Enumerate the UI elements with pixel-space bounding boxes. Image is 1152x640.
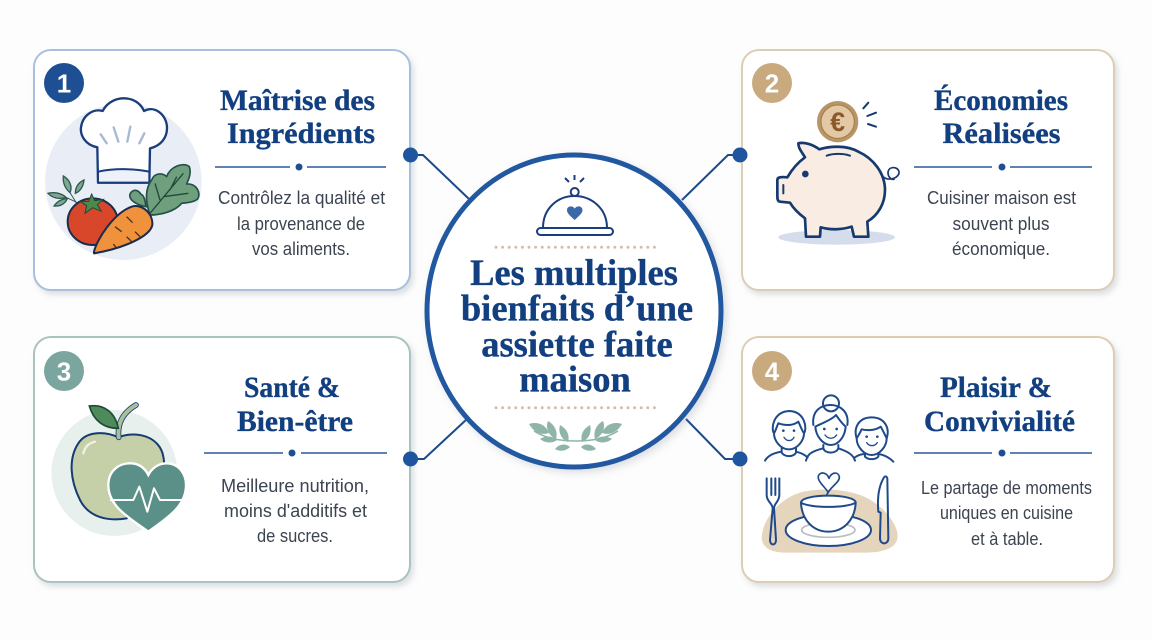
number badge 4 — [752, 351, 792, 391]
description: vos aliments. — [252, 239, 350, 259]
heading: Plaisir & — [940, 371, 1052, 404]
title: maison — [519, 358, 631, 400]
card frame — [34, 50, 410, 290]
icon: chef hat and vegetables — [45, 98, 202, 260]
heading: Réalisées — [942, 117, 1060, 150]
title: Les multiples — [470, 252, 678, 293]
number badge 1: 1 — [57, 68, 71, 98]
heading: Convivialité — [924, 405, 1075, 438]
central circle — [427, 155, 721, 467]
icon: apple and heartbeat — [51, 405, 186, 536]
heading — [934, 84, 1068, 150]
description: moins d'additifs et — [224, 501, 367, 521]
description: souvent plus — [952, 214, 1050, 234]
description: uniques en cuisine — [940, 503, 1073, 523]
description: de sucres. — [257, 526, 333, 546]
heading: Ingrédients — [227, 117, 375, 150]
heading: Économies — [934, 84, 1068, 117]
description: Contrôlez la qualité et — [218, 188, 385, 208]
heading — [237, 371, 353, 438]
number badge 4: 4 — [765, 356, 780, 386]
icon: piggy bank with euro coin — [777, 101, 899, 245]
number badge 3 — [44, 351, 84, 391]
panel: Plaisir & Convivialité — [742, 337, 1114, 582]
icon: family and shared meal — [762, 395, 898, 553]
description — [221, 476, 369, 546]
heading — [924, 371, 1075, 438]
description: Meilleure nutrition, — [221, 476, 369, 496]
description: économique. — [952, 239, 1050, 259]
panel: Économies Réalisées — [742, 50, 1114, 290]
title — [461, 252, 693, 400]
icon: piggy bank with euro coin: € — [830, 107, 845, 137]
heading: Maîtrise des — [220, 84, 375, 117]
card frame — [34, 337, 410, 582]
description: et à table. — [971, 529, 1043, 549]
title: assiette faite — [481, 324, 673, 364]
description — [927, 188, 1076, 259]
description: Cuisiner maison est — [927, 188, 1076, 208]
heading — [220, 84, 375, 150]
number badge 2: 2 — [765, 68, 779, 98]
icon: serving cloche — [537, 175, 613, 235]
number badge 1 — [44, 63, 84, 103]
heading: Santé & — [244, 371, 340, 404]
icon: laurel branches — [529, 421, 622, 451]
number badge 3: 3 — [57, 356, 71, 386]
card frame — [742, 50, 1114, 290]
description — [218, 188, 385, 259]
number badge 2 — [752, 63, 792, 103]
connectors — [403, 148, 748, 466]
description — [921, 478, 1092, 549]
description: la provenance de — [237, 214, 365, 234]
card frame — [742, 337, 1114, 582]
heading: Bien-être — [237, 405, 353, 438]
description: Le partage de moments — [921, 478, 1092, 498]
panel: Santé & Bien-être — [34, 337, 410, 582]
panel: Maîtrise des Ingrédients — [34, 50, 410, 290]
title: bienfaits d’une — [461, 288, 693, 328]
